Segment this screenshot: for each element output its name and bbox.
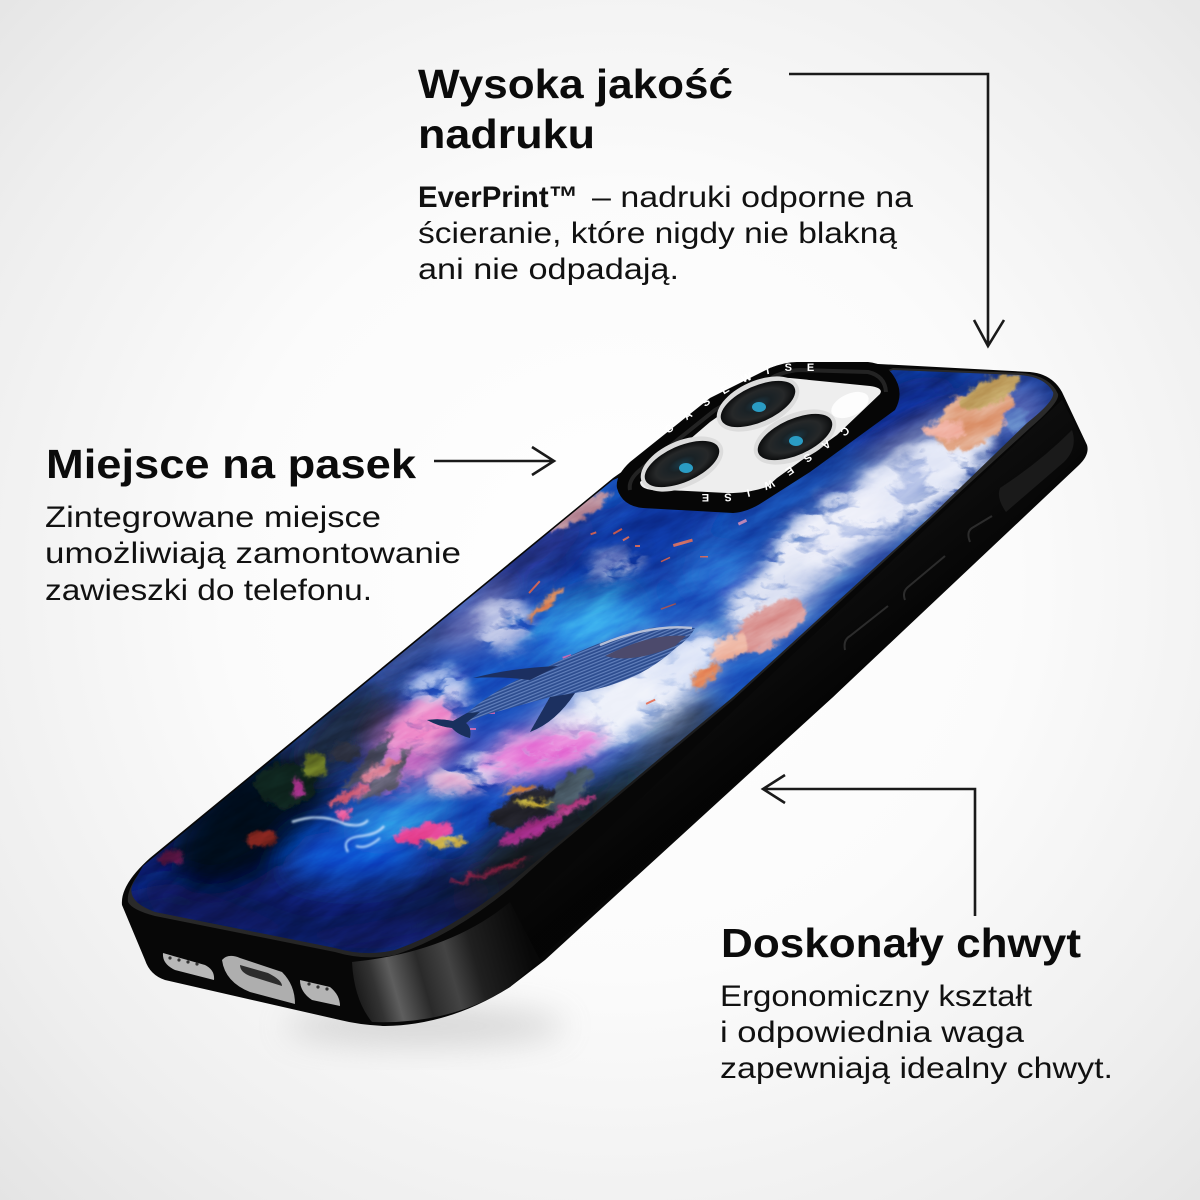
camera island (616, 362, 900, 513)
side wall (470, 400, 1087, 985)
white clouds (410, 412, 1006, 800)
charging port (222, 956, 295, 1004)
orange flecks (470, 519, 747, 730)
description: Zintegrowane miejsce (45, 501, 381, 534)
whale pectoral fin (530, 693, 575, 732)
description: Ergonomiczny kształt (720, 980, 1033, 1013)
glossy corner (352, 902, 540, 1022)
whale highlight (600, 627, 692, 645)
whale body (427, 627, 695, 738)
coral details (157, 752, 597, 888)
description (418, 181, 913, 286)
camera ring (617, 362, 900, 513)
heading: Miejsce na pasek (46, 441, 416, 487)
strap slot (999, 430, 1074, 512)
description: zawieszki do telefonu. (45, 574, 372, 607)
description: umożliwiają zamontowanie (45, 537, 461, 570)
left speaker (163, 953, 214, 980)
ring lettering top: CASEWISE (668, 364, 814, 432)
description: – nadruki odporne na (592, 181, 913, 214)
phone case (122, 362, 1088, 1026)
description: EverPrint™ (418, 181, 578, 214)
dark reef silhouettes (255, 730, 598, 836)
bottom shade (135, 880, 510, 950)
right speaker holes (307, 982, 329, 991)
lens top (708, 365, 808, 443)
texture overlay (132, 371, 1052, 953)
inner rim (128, 368, 1058, 957)
printed art (131, 370, 1054, 954)
left speaker holes (168, 956, 199, 966)
right speaker (300, 980, 340, 1006)
description: zapewniają idealny chwyt. (720, 1052, 1113, 1085)
side button: lower volume (845, 606, 888, 650)
ring lettering bottom: CASEWISE (702, 428, 849, 502)
camera ring shine (630, 370, 886, 490)
heading (418, 61, 733, 157)
lens left (632, 425, 732, 503)
whale dorsal fin (473, 666, 558, 680)
warm clouds (525, 368, 1026, 692)
phone shadow (285, 1006, 565, 1046)
whale tail (427, 712, 480, 738)
lens right (745, 398, 845, 476)
bottom ports (163, 953, 340, 1006)
pink clouds (362, 686, 610, 803)
arrow: strap slot (434, 447, 554, 475)
description (45, 501, 461, 607)
side button: upper volume (904, 556, 945, 600)
heading: nadruku (418, 111, 595, 157)
whale (427, 627, 695, 738)
heading: Wysoka jakość (418, 61, 733, 107)
callout: grip (720, 920, 1113, 1085)
foam (292, 817, 384, 852)
description (720, 980, 1113, 1085)
callout: strap slot (45, 441, 461, 607)
art base (131, 370, 1054, 953)
arrow: print quality (789, 74, 1004, 346)
description: ani nie odpadają. (418, 253, 679, 286)
description: ścieranie, które nigdy nie blakną (418, 217, 897, 250)
case body (122, 362, 1088, 1026)
charging port opening (240, 965, 282, 986)
description: i odpowiednia waga (720, 1016, 1024, 1049)
heading: Doskonały chwyt (721, 920, 1081, 966)
side button: small switch (968, 516, 992, 542)
camera plate (640, 378, 881, 493)
soft colour regions (132, 374, 1053, 953)
callout: print quality (418, 61, 913, 286)
whale belly (605, 636, 686, 658)
flash (827, 387, 873, 423)
arrow: grip (763, 775, 975, 916)
